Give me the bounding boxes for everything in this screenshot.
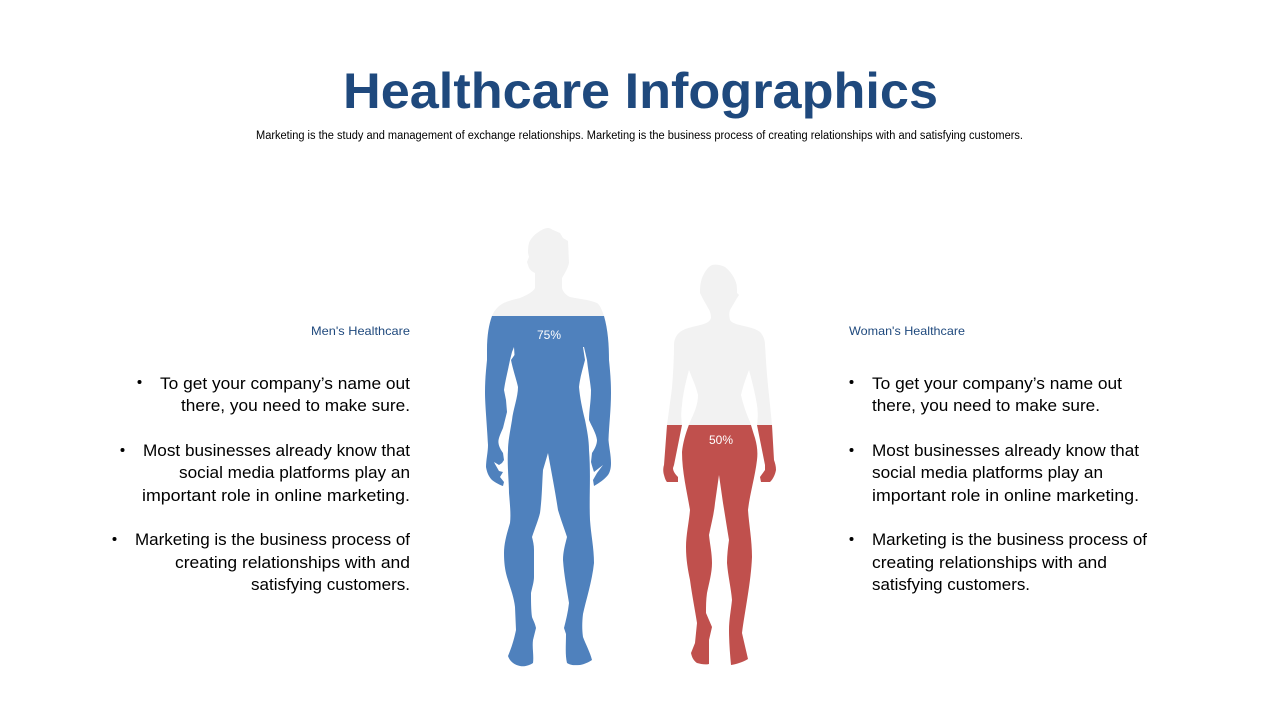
- bullet list: woman's healthcare points: important role in online marketing.: [872, 487, 1139, 505]
- bullet list: men's healthcare points: satisfying customers.: [251, 576, 410, 594]
- male silhouette filled part: [485, 316, 611, 666]
- female silhouette filled part: [663, 425, 776, 665]
- bullet list: men's healthcare points: [112, 375, 411, 594]
- bullet list: woman's healthcare points: social media platforms play an: [872, 464, 1103, 482]
- bullet list: woman's healthcare points: creating relationships with and: [872, 554, 1107, 572]
- heading: men's healthcare: Men's Healthcare: [311, 324, 410, 338]
- female silhouette unfilled part: [667, 264, 772, 425]
- bullet list: woman's healthcare points: Marketing is the business process of: [872, 531, 1148, 549]
- panel: woman's healthcare text: [849, 324, 1148, 594]
- bullet list: men's healthcare points: creating relationships with and: [175, 554, 410, 572]
- bullet list: men's healthcare points: Marketing is the business process of: [135, 531, 411, 549]
- value: 75%: 75%: [537, 328, 561, 342]
- bullet list: men's healthcare points: important role in online marketing.: [142, 487, 410, 505]
- bullet list: men's healthcare points: there, you need to make sure.: [181, 397, 410, 415]
- title: Healthcare Infographics: [343, 63, 938, 119]
- value: 50%: 50%: [709, 433, 733, 447]
- bullet list: woman's healthcare points: To get your company’s name out: [872, 375, 1123, 393]
- chart: male figure 75%: [485, 228, 611, 666]
- heading: woman's healthcare: Woman's Healthcare: [849, 324, 965, 338]
- bullet list: woman's healthcare points: there, you need to make sure.: [872, 397, 1100, 415]
- bullet list: woman's healthcare points: satisfying customers.: [872, 576, 1030, 594]
- bullet list: men's healthcare points: Most businesses already know that: [143, 442, 411, 460]
- chart: female figure 50%: [663, 265, 776, 665]
- bullet list: woman's healthcare points: Most businesses already know that: [872, 442, 1140, 460]
- subtitle: Marketing is the study and management of exchange relationships. Marketing is the business process of creating relationships with and satisfying customers.: [256, 130, 1023, 142]
- bullet list: men's healthcare points: To get your company’s name out: [160, 375, 411, 393]
- bullet list: woman's healthcare points: [850, 375, 1148, 594]
- bullet list: men's healthcare points: social media platforms play an: [179, 464, 410, 482]
- male silhouette unfilled part: [492, 228, 604, 316]
- panel: men's healthcare text: [112, 324, 411, 594]
